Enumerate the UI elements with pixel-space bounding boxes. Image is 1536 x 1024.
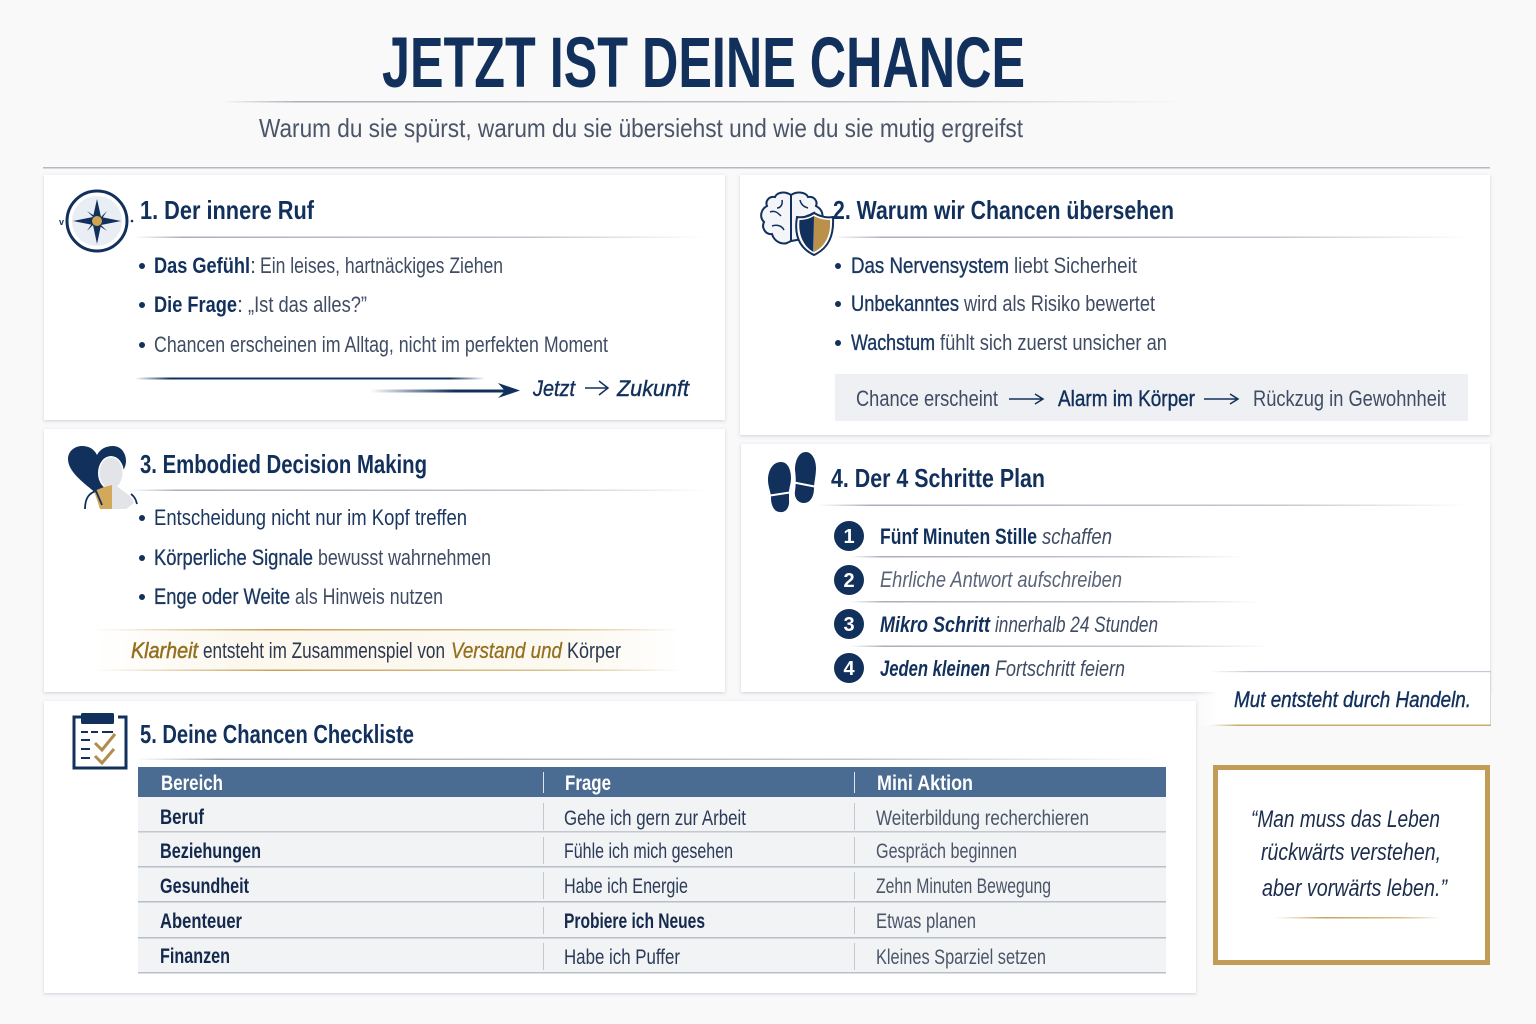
heading: 1. Der innere Ruf xyxy=(140,195,314,225)
bullet list: Das Nervensystem xyxy=(851,253,1009,278)
bullet list: Wachstum xyxy=(851,330,935,355)
row: Beziehungen xyxy=(160,840,1017,863)
table xyxy=(138,767,1166,974)
panel: 4 Der 4 Schritte Plan xyxy=(741,444,1490,692)
panel: 2 Warum wir Chancen übersehen xyxy=(740,175,1490,435)
heading: 5. Deine Chancen Checkliste xyxy=(140,719,414,749)
quote box xyxy=(1216,768,1488,962)
subtitle: Warum du sie spürst, warum du sie übersiehst und wie du sie mutig ergreifst xyxy=(259,113,1024,143)
row: Gesundheit: Gesundheit xyxy=(160,875,249,898)
step 4: Jeden kleinen xyxy=(880,656,990,681)
heading: 2. Warum wir Chancen übersehen xyxy=(833,195,1174,225)
bullet list: liebt Sicherheit xyxy=(1014,253,1137,278)
bullet list: Ein leises, hartnäckiges Ziehen xyxy=(260,253,503,278)
table header: Mini Aktion xyxy=(877,772,973,795)
row: Abenteuer: Etwas planen xyxy=(876,910,976,933)
row: Gesundheit: Habe ich Energie xyxy=(564,875,688,898)
callout: Mut entsteht durch Handeln: Mut entsteht durch Handeln. xyxy=(1234,687,1471,712)
row: Beruf: Beruf xyxy=(160,806,205,829)
row: Beruf: Gehe ich gern zur Arbeit xyxy=(564,807,746,830)
step 1 xyxy=(834,521,1112,551)
bullet list xyxy=(835,253,1167,355)
callout: Klarheit: Verstand und xyxy=(451,638,563,663)
bullet list: fühlt sich zuerst unsicher an xyxy=(940,330,1167,355)
quote box: aber vorwärts leben.” xyxy=(1262,875,1448,902)
row: Beruf: Weiterbildung recherchieren xyxy=(876,807,1089,830)
bullet list: Die Frage xyxy=(154,292,237,317)
bullet list: : xyxy=(250,253,256,278)
arrow: Jetzt to Zukunft: Zukunft xyxy=(616,376,690,401)
panel: 5 Deine Chancen Checkliste xyxy=(44,701,1196,993)
arrow: Jetzt to Zukunft xyxy=(135,376,690,401)
quote box: “Man muss das Leben xyxy=(1251,806,1440,833)
title: JETZT IST DEINE CHANCE xyxy=(382,24,1025,103)
bullet list xyxy=(139,253,608,357)
table header: Frage xyxy=(565,772,611,795)
bullet list: Entscheidung nicht nur im Kopf treffen xyxy=(154,505,467,530)
bullet list: bewusst wahrnehmen xyxy=(318,545,491,570)
quote box: rückwärts verstehen, xyxy=(1261,839,1441,866)
flow bar: Chance erscheint xyxy=(856,386,998,411)
step 3: Mikro Schritt xyxy=(880,612,991,637)
bullet list: : xyxy=(237,292,243,317)
row: Gesundheit xyxy=(160,875,1051,898)
bullet list: Enge oder Weite xyxy=(154,584,290,609)
bullet list: als Hinweis nutzen xyxy=(295,584,443,609)
arrow: Jetzt to Zukunft: Jetzt xyxy=(532,376,576,401)
row: Beziehungen: Gespräch beginnen xyxy=(876,840,1017,863)
panel: 1 Der innere Ruf xyxy=(44,175,725,420)
bullet list: Das Gefühl xyxy=(154,253,250,278)
row: Finanzen: Finanzen xyxy=(160,945,230,968)
step 3: innerhalb 24 Stunden xyxy=(995,612,1158,637)
callout: Mut entsteht durch Handeln xyxy=(1195,671,1491,726)
icon: compass xyxy=(59,191,133,251)
flow bar xyxy=(835,374,1468,421)
row: Abenteuer: Abenteuer xyxy=(160,910,242,933)
bullet list: Unbekanntes xyxy=(851,291,959,316)
bullet list: „Ist das alles?” xyxy=(248,292,367,317)
table header xyxy=(138,767,1166,797)
flow bar: Rückzug in Gewohnheit xyxy=(1253,386,1446,411)
icon: brain with shield xyxy=(761,193,833,255)
icon: clipboard checklist xyxy=(74,713,126,768)
row: Beruf xyxy=(160,806,1089,830)
heading: 4. Der 4 Schritte Plan xyxy=(831,463,1045,493)
heading: 3. Embodied Decision Making xyxy=(140,449,427,479)
callout: Klarheit: Körper xyxy=(567,638,621,663)
row: Beziehungen: Beziehungen xyxy=(160,840,261,863)
callout: Klarheit xyxy=(95,629,680,671)
step 1: Fünf Minuten Stille xyxy=(880,524,1037,549)
step 2: 2 xyxy=(843,570,855,592)
callout: Klarheit: Klarheit xyxy=(131,638,199,663)
step 3 xyxy=(834,609,1158,639)
panel: 3 Embodied Decision Making xyxy=(44,429,725,692)
row: Gesundheit: Zehn Minuten Bewegung xyxy=(876,875,1051,898)
row: Finanzen: Kleines Sparziel setzen xyxy=(876,946,1046,969)
table header: Bereich xyxy=(161,772,223,795)
row: Beziehungen: Fühle ich mich gesehen xyxy=(564,840,733,863)
bullet list: Körperliche Signale xyxy=(154,545,313,570)
bullet list xyxy=(139,505,491,609)
callout: Klarheit: entsteht im Zusammenspiel von xyxy=(203,638,445,663)
bullet list: Chancen erscheinen im Alltag, nicht im perfekten Moment xyxy=(154,332,608,357)
step 3: 3 xyxy=(843,614,855,636)
step 1: 1 xyxy=(843,526,855,548)
step 1: schaffen xyxy=(1042,524,1112,549)
row: Finanzen xyxy=(160,945,1046,969)
icon: footprints xyxy=(767,452,817,512)
step 2: Ehrliche Antwort aufschreiben xyxy=(880,567,1122,592)
step 2 xyxy=(834,565,1122,595)
icon: heart and person xyxy=(68,446,137,509)
row: Abenteuer: Probiere ich Neues xyxy=(564,910,705,933)
step 4: Fortschritt feiern xyxy=(995,656,1125,681)
row: Finanzen: Habe ich Puffer xyxy=(564,946,680,969)
bullet list: wird als Risiko bewertet xyxy=(963,291,1155,316)
step 4: 4 xyxy=(843,658,855,680)
step 4 xyxy=(834,653,1125,683)
icon: compass: v xyxy=(59,217,64,227)
row: Abenteuer xyxy=(160,910,976,933)
flow bar: Alarm im Körper xyxy=(1058,386,1195,411)
